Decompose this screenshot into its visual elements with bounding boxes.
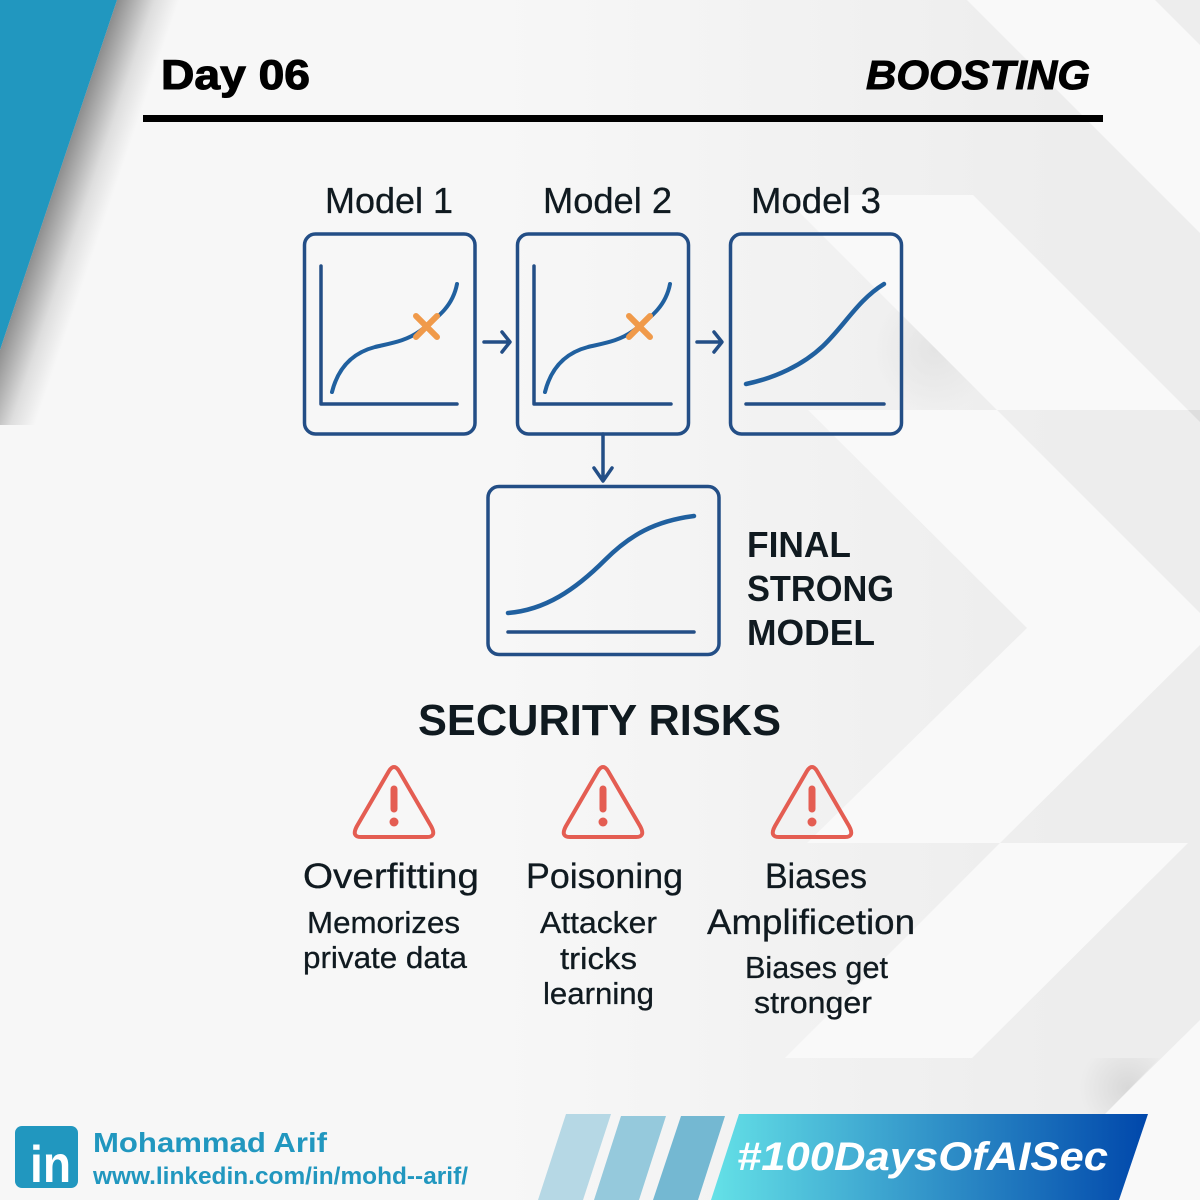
panel: model 2: Model 2 — [543, 180, 672, 221]
risk: overfitting: Overfitting — [303, 857, 479, 896]
author url: www.linkedin.com/in/mohd--arif/ — [92, 1163, 468, 1190]
corner accent: teal wedge with shadow — [0, 0, 185, 425]
arrow: model 2 down to final model — [594, 434, 612, 481]
label: final strong model: FINAL — [747, 524, 851, 565]
risk: overfitting: Memorizes — [307, 905, 460, 940]
risk: overfitting — [303, 767, 479, 975]
risk: poisoning: learning — [543, 976, 654, 1011]
panel: model 1 — [304, 180, 475, 434]
panel: model 1: Model 1 — [325, 180, 453, 221]
label: final strong model: STRONG — [747, 568, 894, 609]
label: final strong model: MODEL — [747, 612, 875, 653]
arrow: model 1 to model 2 — [484, 332, 510, 352]
icon: linkedin logo: in — [30, 1136, 71, 1194]
panel: model 3: Model 3 — [751, 180, 881, 221]
header rule — [143, 115, 1103, 122]
heading: Day 06: Day 06 — [161, 51, 310, 98]
hashtag banner: #100DaysOfAISec — [737, 1135, 1108, 1179]
icon: warning triangle — [773, 767, 851, 837]
risk: biases amplification: Amplificetion — [707, 903, 915, 942]
risk: poisoning: tricks — [560, 941, 637, 976]
risk: poisoning: Attacker — [540, 905, 657, 940]
heading: BOOSTING: BOOSTING — [866, 52, 1090, 98]
panel: model 3 — [730, 180, 902, 434]
panel: final strong model chart — [488, 486, 719, 654]
risk: biases amplification — [707, 767, 915, 1020]
risk: biases amplification: Biases get — [745, 950, 888, 985]
panel: model 2 — [518, 180, 688, 434]
hashtag banner — [711, 1114, 1148, 1200]
label: final strong model — [747, 524, 894, 653]
risk: poisoning: Poisoning — [526, 857, 683, 896]
heading: security risks: SECURITY RISKS — [418, 696, 781, 745]
banner stripes — [538, 1114, 725, 1200]
icon: linkedin logo — [15, 1126, 78, 1194]
risk: overfitting: private data — [303, 940, 468, 975]
risk: biases amplification: stronger — [754, 985, 872, 1020]
icon: warning triangle — [355, 767, 433, 837]
risk: biases amplification: Biases — [765, 857, 867, 896]
icon: warning triangle — [564, 767, 642, 837]
risk: poisoning — [526, 767, 683, 1011]
author name: Mohammad Arif — [93, 1127, 328, 1158]
arrow: model 2 to model 3 — [697, 332, 722, 352]
